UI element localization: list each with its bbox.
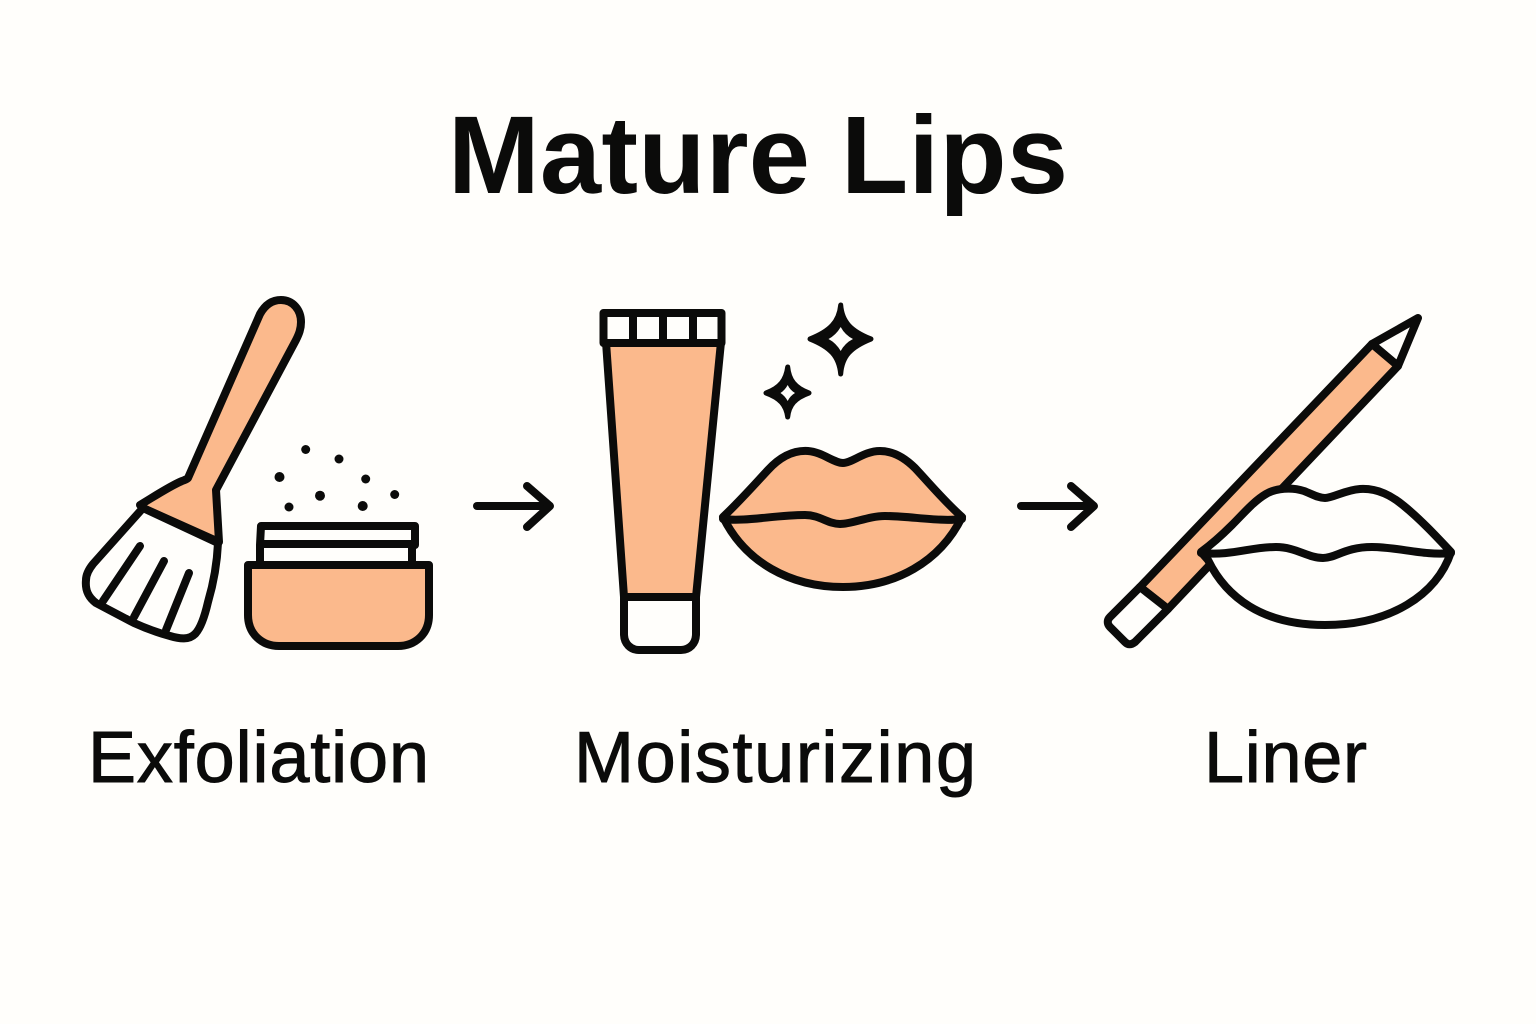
icon: lip liner pencil — [1108, 318, 1418, 644]
icon: scrub jar — [248, 526, 429, 646]
label: exfoliation: Exfoliation — [88, 718, 429, 798]
arrow: exfoliation to moisturizing — [477, 486, 550, 527]
icon: moisturized lips — [723, 451, 962, 587]
arrow: moisturizing to liner — [1021, 486, 1094, 527]
label: moisturizing: Moisturizing — [574, 718, 976, 798]
icon: scrub particles — [274, 445, 399, 512]
icon: outlined lips — [1201, 489, 1451, 625]
icon: sparkles — [766, 305, 871, 417]
icon: exfoliation brush — [86, 300, 301, 638]
title: Mature Lips — [448, 94, 1068, 217]
label: liner: Liner — [1204, 718, 1367, 798]
icon: moisturizer tube — [604, 313, 722, 650]
